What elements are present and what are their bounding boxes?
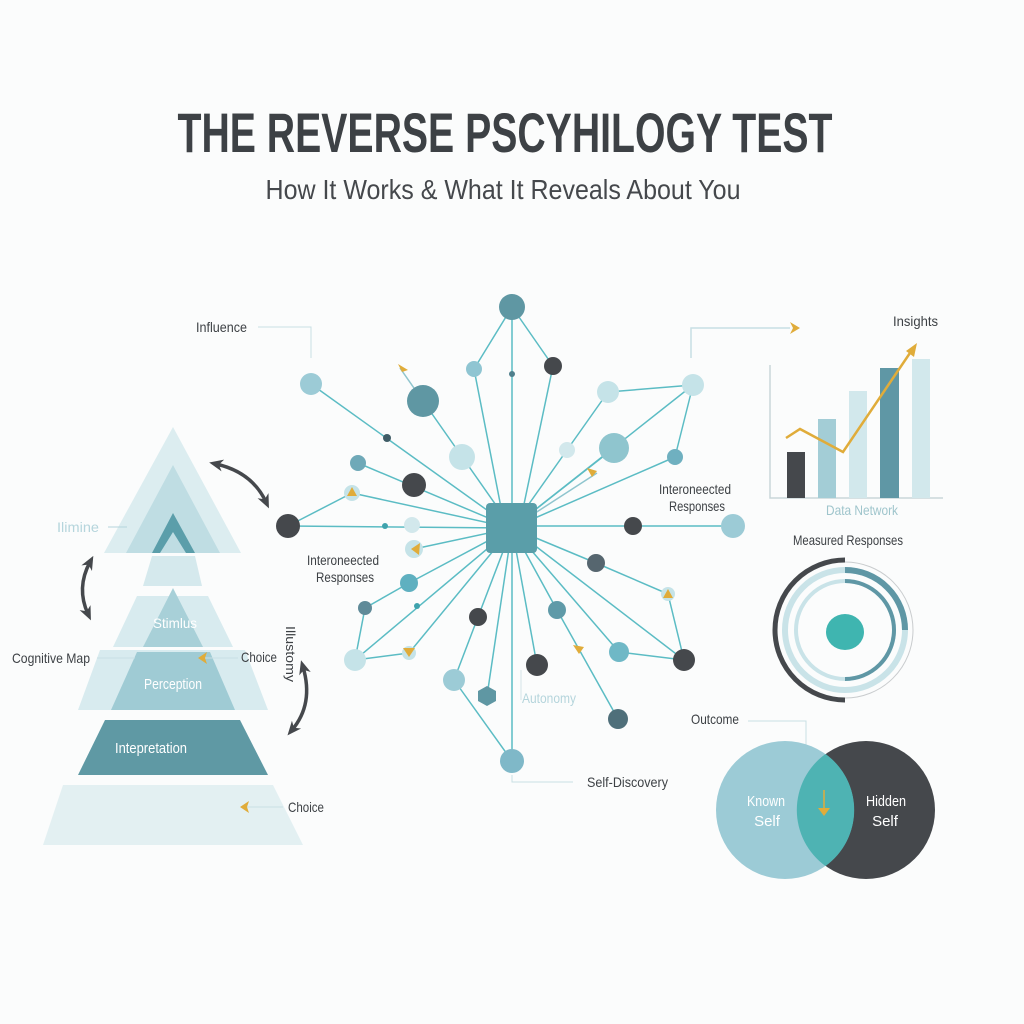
label: interconnected left: Interoneected — [307, 552, 379, 568]
label: choice: Choice — [241, 649, 277, 665]
hub — [486, 503, 537, 553]
label: autonomy — [521, 670, 576, 706]
label: self-discovery: Self-Discovery — [587, 774, 668, 790]
pyramid: interpretation — [78, 720, 268, 775]
network edges — [288, 307, 733, 761]
pyramid: perception — [78, 650, 268, 710]
label: rotated: Illustomy — [283, 626, 298, 683]
venn diagram: Self — [754, 813, 781, 830]
label: interconnected right: Interoneected — [659, 481, 731, 497]
pyramid base — [43, 785, 303, 845]
label: outcome — [691, 711, 806, 748]
panel: pyramid — [43, 427, 303, 845]
label: interconnected left: Responses — [316, 569, 374, 585]
label: cognitive map: Cognitive Map — [12, 650, 90, 666]
label: choice bottom: Choice — [288, 799, 324, 815]
yellow arrows — [347, 364, 673, 657]
arrow: curved 3 — [292, 667, 307, 730]
label: outcome: Outcome — [691, 711, 739, 727]
label: choice — [198, 649, 277, 665]
label: influence: Influence — [196, 319, 247, 335]
network nodes — [276, 294, 745, 773]
arrow: curved 1 — [216, 464, 266, 502]
pyramid: stimulus — [113, 588, 233, 647]
chart: data network: Data Network — [826, 502, 899, 518]
pyramid top — [104, 427, 241, 586]
pyramid: stimulus: Stimlus — [153, 615, 197, 631]
network — [276, 294, 745, 773]
label: Ilimine — [57, 519, 127, 535]
venn diagram: Self — [872, 813, 899, 830]
label: self-discovery — [512, 774, 668, 790]
arrow: curved 2 — [82, 562, 90, 614]
chart: data network: Insights — [893, 313, 938, 329]
label: influence — [196, 319, 311, 358]
label: autonomy: Autonomy — [522, 690, 576, 706]
connector to insights — [691, 322, 800, 358]
pyramid: interpretation: Intepretation — [115, 740, 187, 757]
label: choice bottom — [240, 799, 324, 815]
chart: measured responses rings — [775, 532, 913, 700]
venn diagram: Hidden — [866, 793, 906, 810]
label: Ilimine: Ilimine — [57, 519, 99, 535]
chart: data network — [770, 313, 943, 518]
subtitle: How It Works & What It Reveals About You — [266, 174, 740, 205]
venn diagram: Known — [747, 793, 785, 810]
chart: measured responses rings: Measured Responses — [793, 532, 903, 548]
venn diagram — [716, 741, 935, 879]
pyramid: perception: Perception — [144, 676, 202, 693]
label: interconnected right: Responses — [669, 498, 725, 514]
